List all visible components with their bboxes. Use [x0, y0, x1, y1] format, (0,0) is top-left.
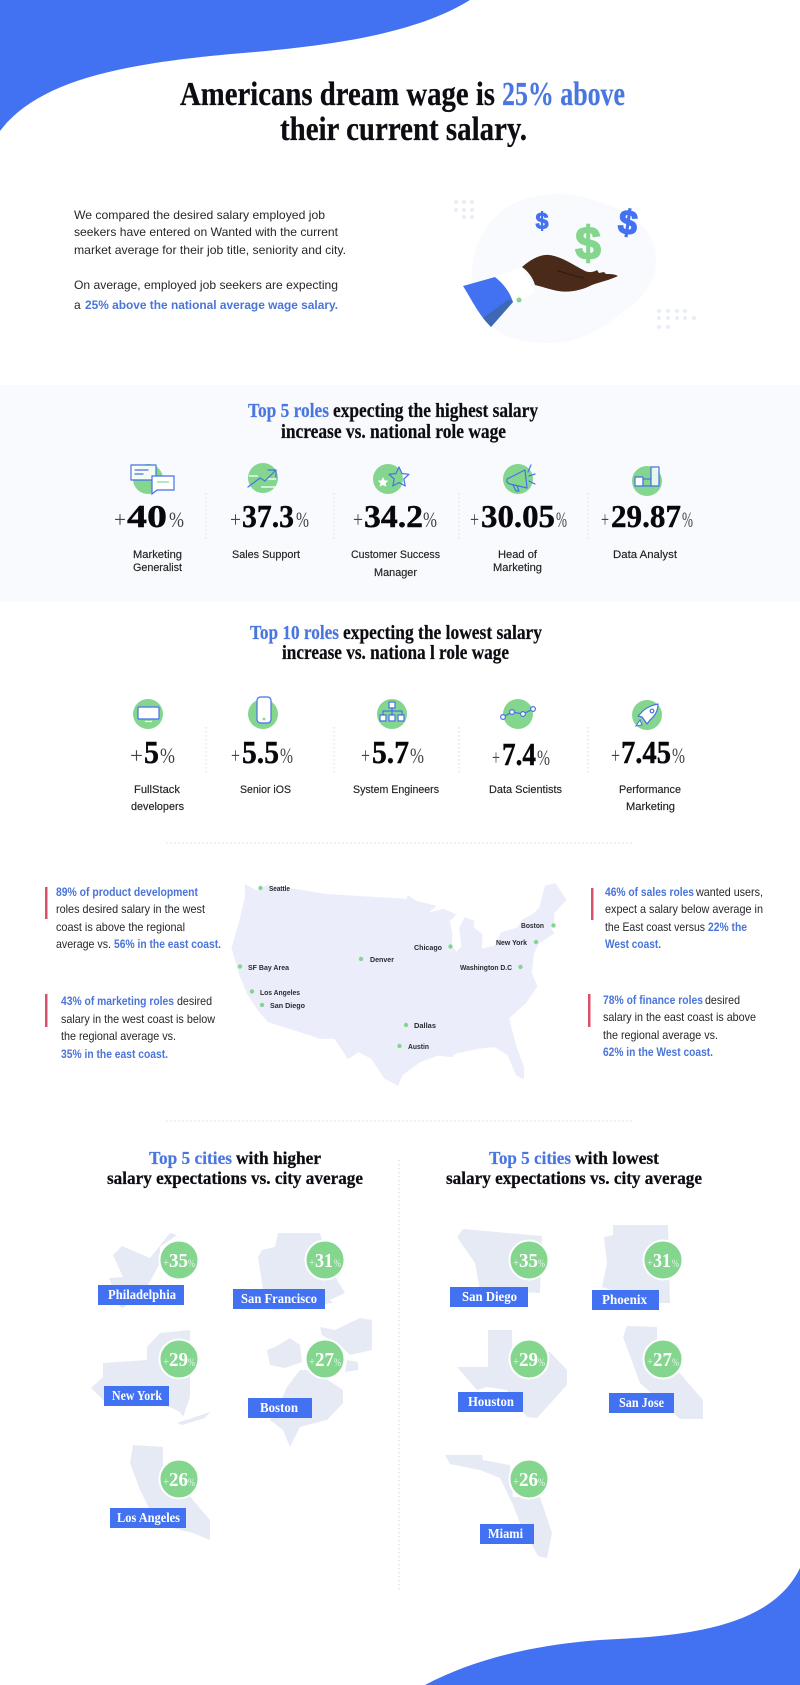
- stat: +29.87%: %: [682, 507, 693, 532]
- stat: +5.5%: [231, 734, 293, 770]
- icon: megaphone: [503, 464, 535, 494]
- stat: +5%: %: [160, 743, 175, 768]
- role labels lowest: System Engineers: [353, 784, 439, 796]
- intro text: We compared the desired salary employed job: [74, 208, 325, 222]
- card: New York: +: [163, 1354, 169, 1368]
- illustration: hand holding dollars: [454, 194, 696, 343]
- card: Los Angeles: 26: [169, 1469, 188, 1491]
- card: Miami: %: [538, 1475, 545, 1489]
- stat: +34.2%: +: [353, 507, 363, 532]
- card: Houston: %: [538, 1355, 545, 1369]
- US map with city markers: Los Angeles: [260, 988, 300, 997]
- card: Philadelphia: [98, 1233, 198, 1308]
- callout: sales roles: [591, 885, 763, 951]
- role labels lowest: developers: [131, 801, 184, 813]
- intro text: market average for their job title, seniority and city.: [74, 243, 346, 257]
- heading: cities with lowest expectations: [446, 1148, 702, 1188]
- card: Philadelphia: +: [163, 1255, 169, 1269]
- card: San Francisco: 31: [315, 1250, 333, 1272]
- stat: +34.2%: %: [423, 507, 437, 532]
- card: Houston: 29: [519, 1349, 538, 1371]
- callout: marketing roles: [45, 994, 215, 1061]
- heading: cities with higher expectations: Top 5 cities: [149, 1148, 232, 1168]
- icon: org chart: [377, 699, 407, 729]
- stat: +5.7%: %: [410, 743, 424, 768]
- callout: finance roles: 62% in the West coast.: [603, 1045, 713, 1059]
- callout: sales roles: 22% the: [708, 920, 747, 934]
- stat: +30.05%: %: [556, 507, 567, 532]
- card: Miami: +: [513, 1474, 519, 1488]
- card: Miami: [445, 1455, 552, 1558]
- card: San Jose: %: [672, 1355, 679, 1369]
- heading: top 5 roles: increase vs. national role wage: [281, 421, 506, 443]
- stat: +34.2%: [353, 498, 437, 534]
- stat: +5.5%: %: [280, 743, 293, 768]
- top blue wave: [0, 0, 470, 131]
- callout: sales roles: the East coast versus: [605, 920, 705, 934]
- intro text: seekers have entered on Wanted with the current: [74, 225, 339, 239]
- card: Houston: [457, 1330, 567, 1418]
- icon: monitor: [133, 699, 163, 729]
- bottom blue wave: [425, 1568, 800, 1685]
- stat: +5.7%: 5.7: [372, 734, 409, 770]
- card: Houston: +: [513, 1354, 519, 1368]
- callout: sales roles: expect a salary below average in: [605, 902, 763, 916]
- US map with city markers: SF Bay Area: [248, 963, 290, 972]
- role labels: Data Analyst: [613, 549, 677, 561]
- callout: product development: coast is above the regional: [56, 920, 185, 934]
- stat: +7.45%: +: [611, 743, 620, 768]
- callout: marketing roles: 35% in the east coast.: [61, 1047, 168, 1061]
- role labels: Generalist: [133, 562, 182, 574]
- heading: cities with higher expectations: with higher: [236, 1148, 321, 1168]
- US map with city markers: San Diego: [270, 1001, 305, 1010]
- stat: +7.4%: [492, 736, 550, 772]
- US map with city markers: [232, 884, 566, 1085]
- callout: marketing roles: desired: [177, 994, 212, 1008]
- intro text: On average, employed job seekers are expecting: [74, 278, 338, 292]
- card: New York: 29: [169, 1349, 188, 1371]
- panel: highest salary increase roles: [0, 385, 800, 602]
- stat: +5.5%: +: [231, 743, 240, 768]
- stat: +37.3%: +: [230, 507, 241, 532]
- heading: cities with lowest expectations: salary expectations vs. city average: [446, 1168, 702, 1188]
- icon: star: [373, 464, 409, 494]
- callout: product development: 56% in the east coast.: [114, 937, 221, 951]
- callout: product development: 89% of product development: [56, 885, 198, 899]
- stat: +5%: +: [130, 743, 143, 768]
- intro text: 25% above the national average wage salary.: [85, 298, 338, 312]
- heading: top 5 roles: [248, 400, 538, 443]
- icon: chat bubbles: [131, 464, 174, 494]
- card: Phoenix: 31: [653, 1250, 671, 1272]
- stat: +34.2%: 34.2: [364, 498, 423, 534]
- heading: cities with lowest expectations: Top 5 cities: [489, 1148, 571, 1168]
- callout: finance roles: salary in the east coast is above: [603, 1010, 756, 1024]
- stat: +5.7%: +: [361, 743, 370, 768]
- card: San Diego: 35: [519, 1250, 538, 1272]
- card: San Jose: [609, 1326, 703, 1419]
- callout: marketing roles: 43% of marketing roles: [61, 994, 174, 1008]
- role labels: [133, 549, 677, 579]
- callout: sales roles: West coast.: [605, 937, 661, 951]
- stat: +30.05%: +: [470, 507, 479, 532]
- card: New York: %: [188, 1355, 195, 1369]
- stat: +7.45%: 7.45: [621, 734, 671, 770]
- card: New York: [91, 1330, 210, 1425]
- intro text: [74, 208, 346, 312]
- stat: +29.87%: +: [601, 507, 609, 532]
- callout: marketing roles: the regional average vs.: [61, 1029, 176, 1043]
- card: New York: New York: [112, 1389, 162, 1404]
- illustration: hand holding dollars: $: [616, 203, 640, 243]
- callout: finance roles: 78% of finance roles: [603, 993, 703, 1007]
- title: Americans dream wage is: [180, 76, 495, 113]
- card: Boston: %: [334, 1355, 341, 1369]
- icon: data line: [501, 699, 535, 729]
- card: Phoenix: %: [672, 1256, 679, 1270]
- heading: top 10 roles: increase vs. nationa l role wage: [282, 642, 509, 664]
- stat: +5%: 5: [144, 734, 159, 770]
- heading: top 5 roles: Top 5 roles: [248, 400, 329, 422]
- role labels: Marketing: [493, 562, 542, 574]
- card: San Jose: San Jose: [619, 1396, 664, 1411]
- card: San Diego: %: [538, 1256, 545, 1270]
- illustration: hand holding dollars: $: [575, 217, 601, 269]
- card: Philadelphia: 35: [169, 1250, 188, 1272]
- stat: +37.3%: 37.3: [242, 498, 294, 534]
- heading: top 10 roles: expecting the lowest salary: [343, 622, 542, 644]
- callout: sales roles: wanted users,: [695, 885, 763, 899]
- card: San Francisco: %: [334, 1256, 341, 1270]
- stat: +5%: [130, 734, 175, 770]
- stat: +29.87%: 29.87: [611, 498, 681, 534]
- callout: finance roles: desired: [705, 993, 740, 1007]
- card: Philadelphia: %: [188, 1256, 195, 1270]
- card: Phoenix: [592, 1225, 682, 1310]
- US map with city markers: Washington D.C: [460, 963, 513, 972]
- card: Houston: Houston: [468, 1395, 514, 1410]
- icon: phone: [248, 697, 278, 729]
- role labels lowest: [131, 784, 681, 813]
- card: Los Angeles: +: [163, 1474, 169, 1488]
- icon: bar blocks: [632, 466, 662, 496]
- role labels: Customer Success: [351, 549, 440, 561]
- card: Boston: 27: [315, 1349, 334, 1371]
- callout: finance roles: the regional average vs.: [603, 1028, 718, 1042]
- stat: +7.4%: 7.4: [502, 736, 536, 772]
- card: Boston: +: [309, 1354, 315, 1368]
- heading: cities with lowest expectations: with lowest: [575, 1148, 659, 1168]
- callout: product development: average vs.: [56, 937, 111, 951]
- card: San Francisco: [233, 1233, 345, 1310]
- role labels: Sales Support: [232, 549, 300, 561]
- card: Los Angeles: %: [188, 1475, 195, 1489]
- callout: marketing roles: salary in the west coast is below: [61, 1012, 215, 1026]
- intro text: a: [74, 298, 81, 312]
- card: San Francisco: +: [309, 1255, 315, 1269]
- stat: +7.4%: +: [492, 745, 500, 770]
- stat: +5.7%: [361, 734, 424, 770]
- card: Boston: [248, 1318, 372, 1447]
- card: Philadelphia: Philadelphia: [108, 1288, 176, 1303]
- role labels: Manager: [374, 567, 417, 579]
- card: Phoenix: +: [647, 1255, 653, 1269]
- US map with city markers: Boston: [521, 921, 544, 930]
- card: San Jose: 27: [653, 1349, 672, 1371]
- US map with city markers: Austin: [408, 1042, 429, 1051]
- card: Miami: 26: [519, 1469, 538, 1491]
- callout: sales roles: 46% of sales roles: [605, 885, 694, 899]
- stat: +7.45%: %: [672, 743, 685, 768]
- stat: +37.3%: %: [296, 507, 309, 532]
- heading: top 5 roles: expecting the highest salary: [333, 400, 538, 422]
- callout: product development: [45, 885, 221, 951]
- heading: top 10 roles: [250, 622, 542, 664]
- heading: cities with higher expectations: salary expectations vs. city average: [107, 1168, 363, 1188]
- icon: growth arrow: [248, 463, 278, 493]
- card: Los Angeles: [110, 1445, 210, 1540]
- stat: +7.4%: %: [537, 745, 550, 770]
- title: [180, 76, 625, 148]
- role labels lowest: FullStack: [134, 784, 180, 796]
- role labels lowest: Marketing: [626, 801, 675, 813]
- card: Phoenix: Phoenix: [602, 1293, 647, 1308]
- icon: rocket: [632, 700, 662, 730]
- US map with city markers: Chicago: [414, 943, 442, 952]
- heading: top 10 roles: Top 10 roles: [250, 622, 339, 644]
- card: San Diego: +: [513, 1255, 519, 1269]
- card: Boston: Boston: [260, 1401, 298, 1416]
- stat: +40%: %: [169, 507, 184, 532]
- stat: +40%: +: [114, 507, 126, 532]
- callout: finance roles: [588, 993, 756, 1059]
- heading: cities with higher expectations: [107, 1148, 363, 1188]
- title: their current salary.: [280, 111, 527, 148]
- card: San Francisco: San Francisco: [241, 1292, 317, 1307]
- role labels lowest: Data Scientists: [489, 784, 562, 796]
- card: Los Angeles: Los Angeles: [117, 1511, 180, 1526]
- US map with city markers: Seattle: [269, 884, 290, 893]
- stat: +40%: 40: [127, 498, 167, 534]
- illustration: hand holding dollars: $: [536, 208, 549, 234]
- role labels: Marketing: [133, 549, 182, 561]
- card: San Diego: San Diego: [462, 1290, 517, 1305]
- card: San Jose: +: [647, 1354, 653, 1368]
- role labels lowest: Performance: [619, 784, 681, 796]
- title: 25% above: [502, 76, 625, 113]
- stat: +40%: [114, 498, 184, 534]
- US map with city markers: Denver: [370, 955, 394, 964]
- role labels lowest: Senior iOS: [240, 784, 291, 796]
- US map with city markers: New York: [496, 938, 528, 947]
- role labels: Head of: [498, 549, 538, 561]
- callout: product development: roles desired salary in the west: [56, 902, 206, 916]
- card: San Diego: [450, 1229, 548, 1307]
- US map with city markers: Dallas: [414, 1021, 436, 1030]
- stat: +5.5%: 5.5: [242, 734, 279, 770]
- card: Miami: Miami: [488, 1527, 523, 1542]
- stat: +30.05%: 30.05: [481, 498, 555, 534]
